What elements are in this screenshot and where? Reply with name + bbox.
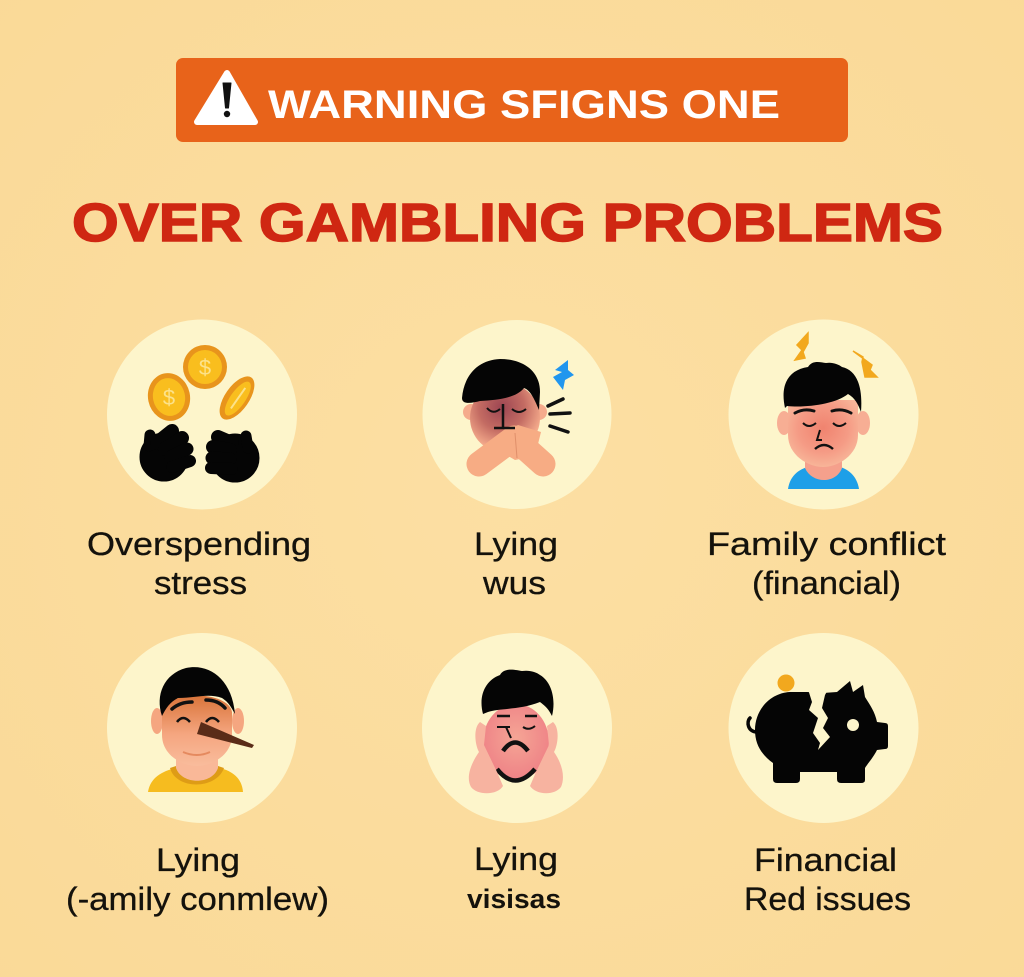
icon: falling coins: $ (199, 355, 211, 380)
icon: falling coins: $ (163, 385, 175, 410)
banner text: WARNING SFIGNS ONE (268, 83, 780, 127)
label (87, 526, 311, 601)
label (474, 526, 558, 601)
label (707, 526, 946, 601)
panel: lying family (66, 633, 329, 917)
icon: broken piggy bank (748, 674, 888, 783)
label: (-amily conmlew) (66, 881, 329, 917)
label: Lying (156, 842, 240, 878)
label (66, 842, 329, 917)
label (467, 841, 561, 914)
icon: person with hands pressed (462, 359, 574, 464)
label: Overspending (87, 526, 311, 562)
warning banner (176, 58, 848, 142)
icon: left hand (140, 431, 190, 481)
label: Lying (474, 526, 558, 562)
label: Family conflict (707, 526, 946, 562)
label: wus (482, 565, 546, 601)
label: Red issues (744, 881, 911, 917)
label (744, 842, 911, 917)
icon: right hand (211, 434, 259, 482)
label: Lying (474, 841, 558, 877)
icon: stressed person (777, 333, 877, 489)
panel: financial red issues (728, 633, 918, 917)
label: (financial) (752, 565, 901, 601)
icon: person with long nose (148, 667, 254, 792)
panel: family conflict (707, 320, 946, 601)
icon: person holding face (469, 670, 563, 793)
label: stress (154, 565, 247, 601)
title: OVER GAMBLING PROBLEMS (72, 193, 943, 253)
icon: falling coins (143, 345, 261, 425)
label: Financial (754, 842, 897, 878)
panel: lying wus (422, 320, 612, 601)
label: visisas (467, 884, 561, 914)
icon: warning triangle (197, 73, 255, 122)
panel: lying visisas (422, 633, 612, 914)
panel: overspending stress (87, 320, 311, 601)
